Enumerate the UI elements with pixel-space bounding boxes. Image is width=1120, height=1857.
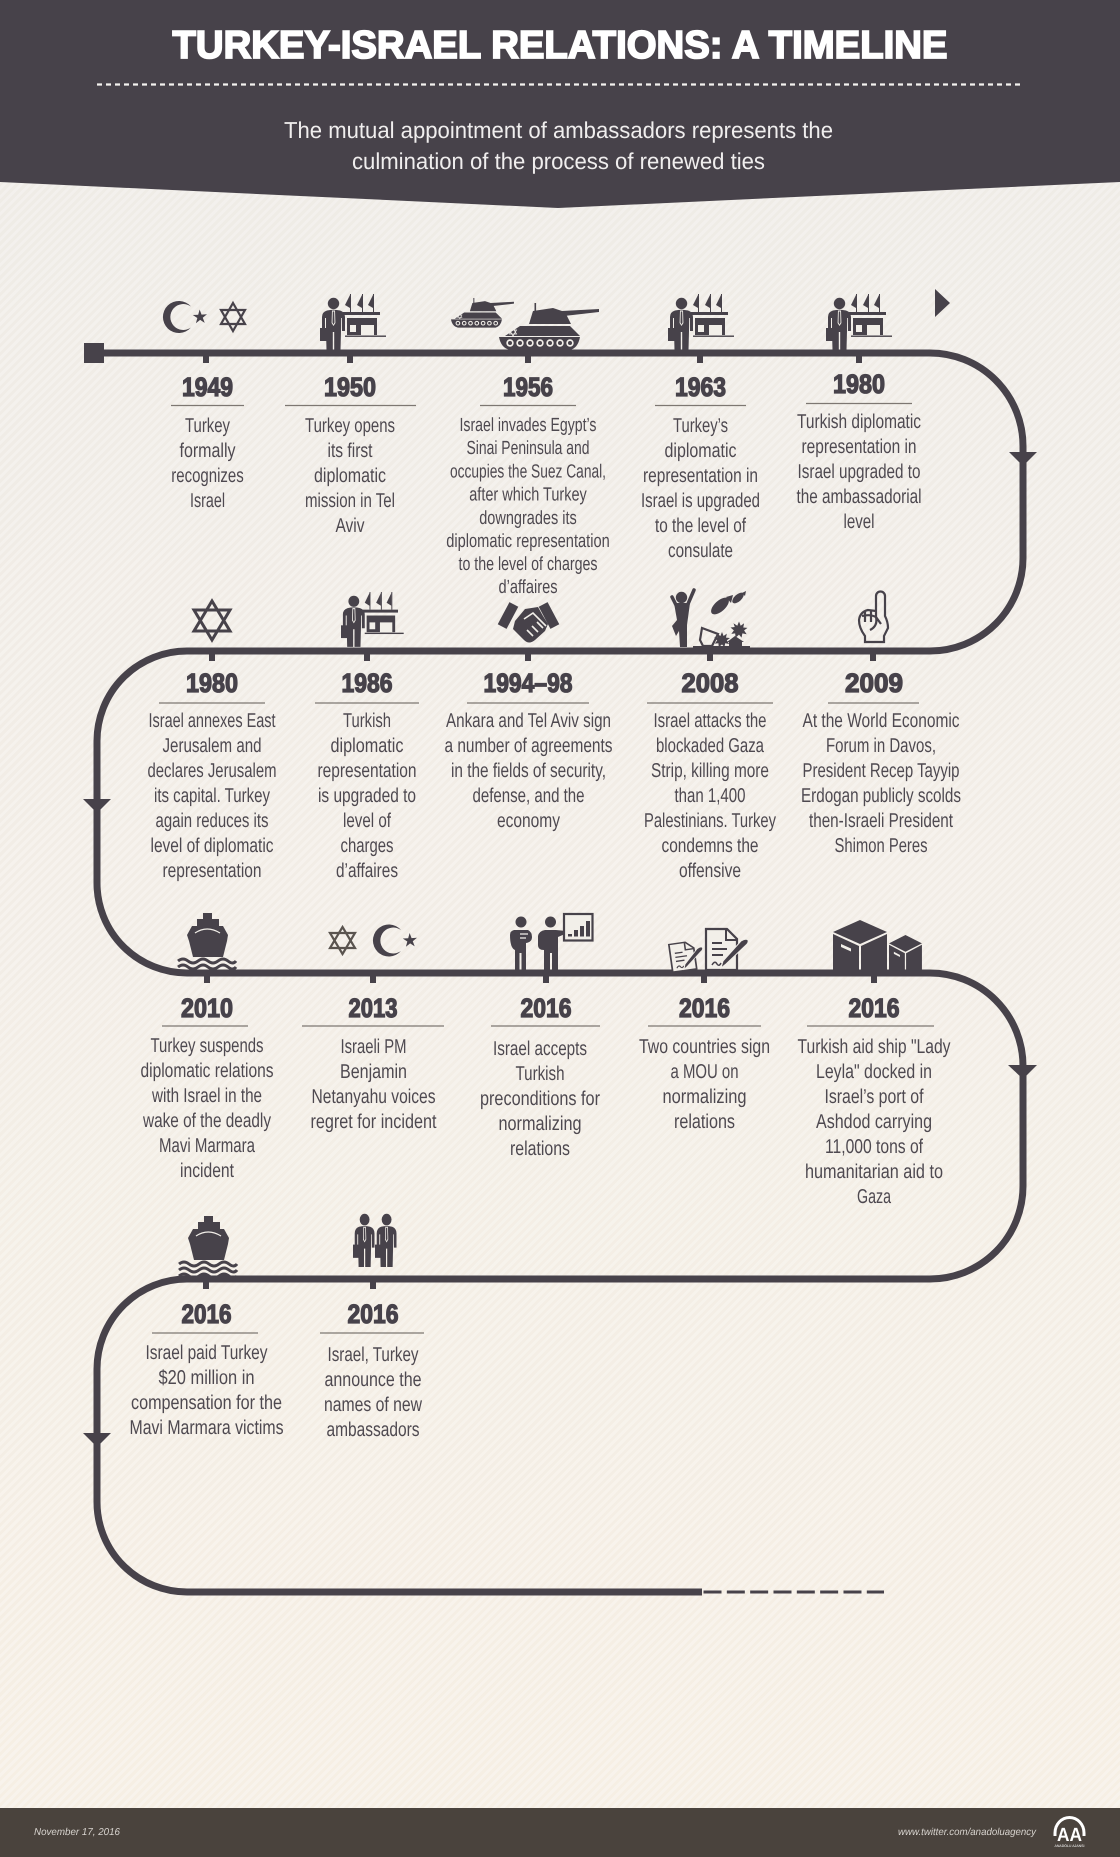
description xyxy=(324,1344,422,1441)
title: TURKEY-ISRAEL RELATIONS: A TIMELINE xyxy=(172,24,948,67)
description: Mavi Marmara xyxy=(159,1135,256,1157)
description: Jerusalem and xyxy=(162,735,262,757)
description: its first xyxy=(328,440,373,462)
event: 1949 xyxy=(163,301,245,512)
description: level of diplomatic xyxy=(150,835,274,857)
event: 2016 compensation xyxy=(130,1216,284,1439)
event: 2016 preconditions xyxy=(480,914,600,1160)
description xyxy=(641,415,760,562)
description: compensation for the xyxy=(131,1392,282,1414)
description: Aviv xyxy=(336,515,364,537)
year: 2016 xyxy=(848,993,900,1023)
description: level xyxy=(844,511,874,533)
event: 1980 upgrade xyxy=(796,294,922,533)
description: Palestinians. Turkey xyxy=(644,810,776,832)
description: downgrades its xyxy=(479,508,577,529)
year: 2016 xyxy=(348,1299,398,1329)
icon: star of David and crescent xyxy=(330,924,418,956)
description: Forum in Davos, xyxy=(826,735,936,757)
source link: www.twitter.com/anadoluagency xyxy=(898,1827,1037,1838)
description: Turkey’s xyxy=(673,415,728,437)
description: Israeli PM xyxy=(340,1036,406,1058)
description: in the fields of security, xyxy=(451,760,606,782)
description: Strip, killing more xyxy=(651,760,769,782)
description xyxy=(130,1342,284,1439)
description: At the World Economic xyxy=(802,710,960,732)
description: $20 million in xyxy=(158,1367,254,1389)
subtitle xyxy=(284,117,833,174)
description: recognizes xyxy=(171,465,244,487)
description: declares Jerusalem xyxy=(148,760,276,782)
event: 2016 ambassadors xyxy=(320,1214,424,1441)
icon: play arrow xyxy=(935,289,950,317)
event: 1994-98 xyxy=(444,602,612,832)
description: blockaded Gaza xyxy=(656,735,765,757)
icon: signed documents xyxy=(669,929,748,972)
description: condemns the xyxy=(662,835,758,857)
description xyxy=(798,1036,950,1208)
description: defense, and the xyxy=(472,785,584,807)
year: 1950 xyxy=(324,372,376,402)
description xyxy=(480,1038,600,1160)
description xyxy=(171,415,244,512)
event: 2013 xyxy=(302,924,444,1133)
description: again reduces its xyxy=(156,810,268,832)
description: Israel accepts xyxy=(493,1038,587,1060)
year: 2010 xyxy=(181,993,233,1023)
event: 2008 xyxy=(644,590,776,882)
description: is upgraded to xyxy=(318,785,416,807)
description: incident xyxy=(180,1160,234,1182)
description xyxy=(801,710,961,857)
description: Israel, Turkey xyxy=(328,1344,418,1366)
icon: diplomat and consulate xyxy=(668,294,734,350)
icon: tanks xyxy=(451,298,599,350)
description: offensive xyxy=(679,860,741,882)
description: 11,000 tons of xyxy=(825,1136,923,1158)
description: Leyla" docked in xyxy=(816,1061,932,1083)
description: its capital. Turkey xyxy=(154,785,270,807)
description: Shimon Peres xyxy=(834,835,928,857)
description: diplomatic xyxy=(314,465,386,487)
description: Israel’s port of xyxy=(824,1086,924,1108)
year: 1986 xyxy=(342,668,392,698)
description: after which Turkey xyxy=(469,484,587,506)
description: formally xyxy=(180,440,236,462)
description: occupies the Suez Canal, xyxy=(450,462,606,482)
event: 2016 MOU xyxy=(639,929,770,1133)
description: relations xyxy=(510,1138,570,1160)
description: diplomatic relations xyxy=(140,1060,274,1082)
description xyxy=(639,1036,770,1133)
description xyxy=(318,710,416,882)
description: names of new xyxy=(324,1394,422,1416)
icon: crescent and star of David xyxy=(163,301,245,333)
description: Netanyahu voices xyxy=(312,1086,436,1108)
logo: Anadolu Agency: ANADOLU AJANSI xyxy=(1054,1844,1085,1848)
icon: diplomat and embassy xyxy=(826,294,892,350)
description: a MOU on xyxy=(670,1061,738,1083)
description: Two countries sign xyxy=(639,1036,770,1058)
description: Turkey xyxy=(185,415,230,437)
description: normalizing xyxy=(662,1086,746,1108)
icon: presentation xyxy=(510,914,592,972)
subtitle: The mutual appointment of ambassadors represents the xyxy=(284,117,833,143)
icon: raised finger xyxy=(859,592,888,642)
year: 2009 xyxy=(845,668,903,698)
icon: diplomat and mission xyxy=(320,294,386,350)
description: Turkish xyxy=(516,1063,564,1085)
description: ambassadors xyxy=(326,1419,420,1441)
icon: diplomat and mission xyxy=(341,592,404,647)
description: Turkey suspends xyxy=(150,1035,264,1057)
description xyxy=(310,1036,437,1133)
event: 1950 xyxy=(285,294,416,537)
description: the ambassadorial xyxy=(796,486,922,508)
description: preconditions for xyxy=(480,1088,600,1110)
description: representation in xyxy=(643,465,758,487)
icon: two diplomats xyxy=(353,1214,396,1267)
description: representation in xyxy=(802,436,916,458)
footer xyxy=(0,1808,1120,1857)
description: diplomatic representation xyxy=(446,531,610,552)
description: Israel annexes East xyxy=(148,710,276,732)
event: 1980 annexation xyxy=(148,601,276,882)
description: wake of the deadly xyxy=(142,1110,271,1132)
description: diplomatic xyxy=(330,735,404,757)
year: 1994–98 xyxy=(484,668,572,698)
year: 1980 xyxy=(186,668,238,698)
description: normalizing xyxy=(498,1113,582,1135)
description: Turkey opens xyxy=(305,415,395,437)
description: announce the xyxy=(324,1369,422,1391)
description: Israel invades Egypt’s xyxy=(460,415,596,436)
description: Ankara and Tel Aviv sign xyxy=(446,710,611,732)
year: 2008 xyxy=(682,668,738,698)
year: 1980 xyxy=(833,369,885,399)
description: Turkish xyxy=(343,710,391,732)
description: Mavi Marmara victims xyxy=(130,1417,284,1439)
year: 1956 xyxy=(503,372,553,402)
description: consulate xyxy=(668,540,733,562)
timeline path xyxy=(83,343,1037,1592)
icon: ship with waves xyxy=(179,1216,237,1278)
description xyxy=(796,411,922,533)
description: Turkish diplomatic xyxy=(797,411,921,433)
year: 1963 xyxy=(675,372,726,402)
description: to the level of xyxy=(655,515,746,537)
year: 2013 xyxy=(348,993,398,1023)
description: Ashdod carrying xyxy=(816,1111,932,1133)
event: 1963 xyxy=(641,294,760,562)
description: humanitarian aid to xyxy=(805,1161,943,1183)
description: a number of agreements xyxy=(444,735,612,757)
logo: Anadolu Agency: AA xyxy=(1057,1825,1082,1846)
description: d’affaires xyxy=(498,577,558,598)
description: than 1,400 xyxy=(674,785,746,807)
event: 2010 xyxy=(140,913,274,1182)
description: Gaza xyxy=(857,1186,892,1208)
event: 1956 xyxy=(446,298,610,598)
logo: Anadolu Agency xyxy=(1054,1817,1085,1848)
icon: attack on Gaza xyxy=(672,590,750,648)
description xyxy=(644,710,776,882)
description: representation xyxy=(318,760,416,782)
description: to the level of charges xyxy=(458,554,598,575)
description: level of xyxy=(343,810,391,832)
description: mission in Tel xyxy=(305,490,395,512)
description xyxy=(305,415,395,537)
description: economy xyxy=(497,810,560,832)
description: Israel attacks the xyxy=(654,710,766,732)
description: Israel is upgraded xyxy=(641,490,760,512)
description: Israel xyxy=(190,490,225,512)
description: Benjamin xyxy=(340,1061,407,1083)
description: regret for incident xyxy=(310,1111,437,1133)
description xyxy=(444,710,612,832)
year: 2016 xyxy=(679,993,730,1023)
icon: aid boxes xyxy=(833,920,922,971)
description: representation xyxy=(162,860,262,882)
description xyxy=(446,415,610,598)
description: Israel upgraded to xyxy=(798,461,920,483)
description: Israel paid Turkey xyxy=(146,1342,268,1364)
event: 2016 aid ship xyxy=(798,920,950,1208)
year: 2016 xyxy=(520,993,572,1023)
description: with Israel in the xyxy=(151,1085,262,1107)
description xyxy=(148,710,276,882)
description: then-Israeli President xyxy=(809,810,953,832)
description: Erdogan publicly scolds xyxy=(801,785,961,807)
year: 2016 xyxy=(182,1299,232,1329)
icon: star of David xyxy=(194,601,230,640)
subtitle: culmination of the process of renewed ties xyxy=(352,148,765,174)
description: President Recep Tayyip xyxy=(802,760,960,782)
description: diplomatic xyxy=(664,440,736,462)
year: 1949 xyxy=(182,372,233,402)
event: 1986 xyxy=(315,592,419,882)
icon: ship xyxy=(178,913,236,969)
date: November 17, 2016 xyxy=(34,1827,120,1838)
description: Sinai Peninsula and xyxy=(466,438,590,459)
description: Turkish aid ship "Lady xyxy=(798,1036,950,1058)
header band xyxy=(0,0,1120,208)
description: d’affaires xyxy=(336,860,398,882)
description: relations xyxy=(674,1111,735,1133)
description xyxy=(140,1035,274,1182)
description: charges xyxy=(340,835,394,857)
icon: handshake xyxy=(498,602,559,642)
event: 2009 xyxy=(801,592,961,857)
